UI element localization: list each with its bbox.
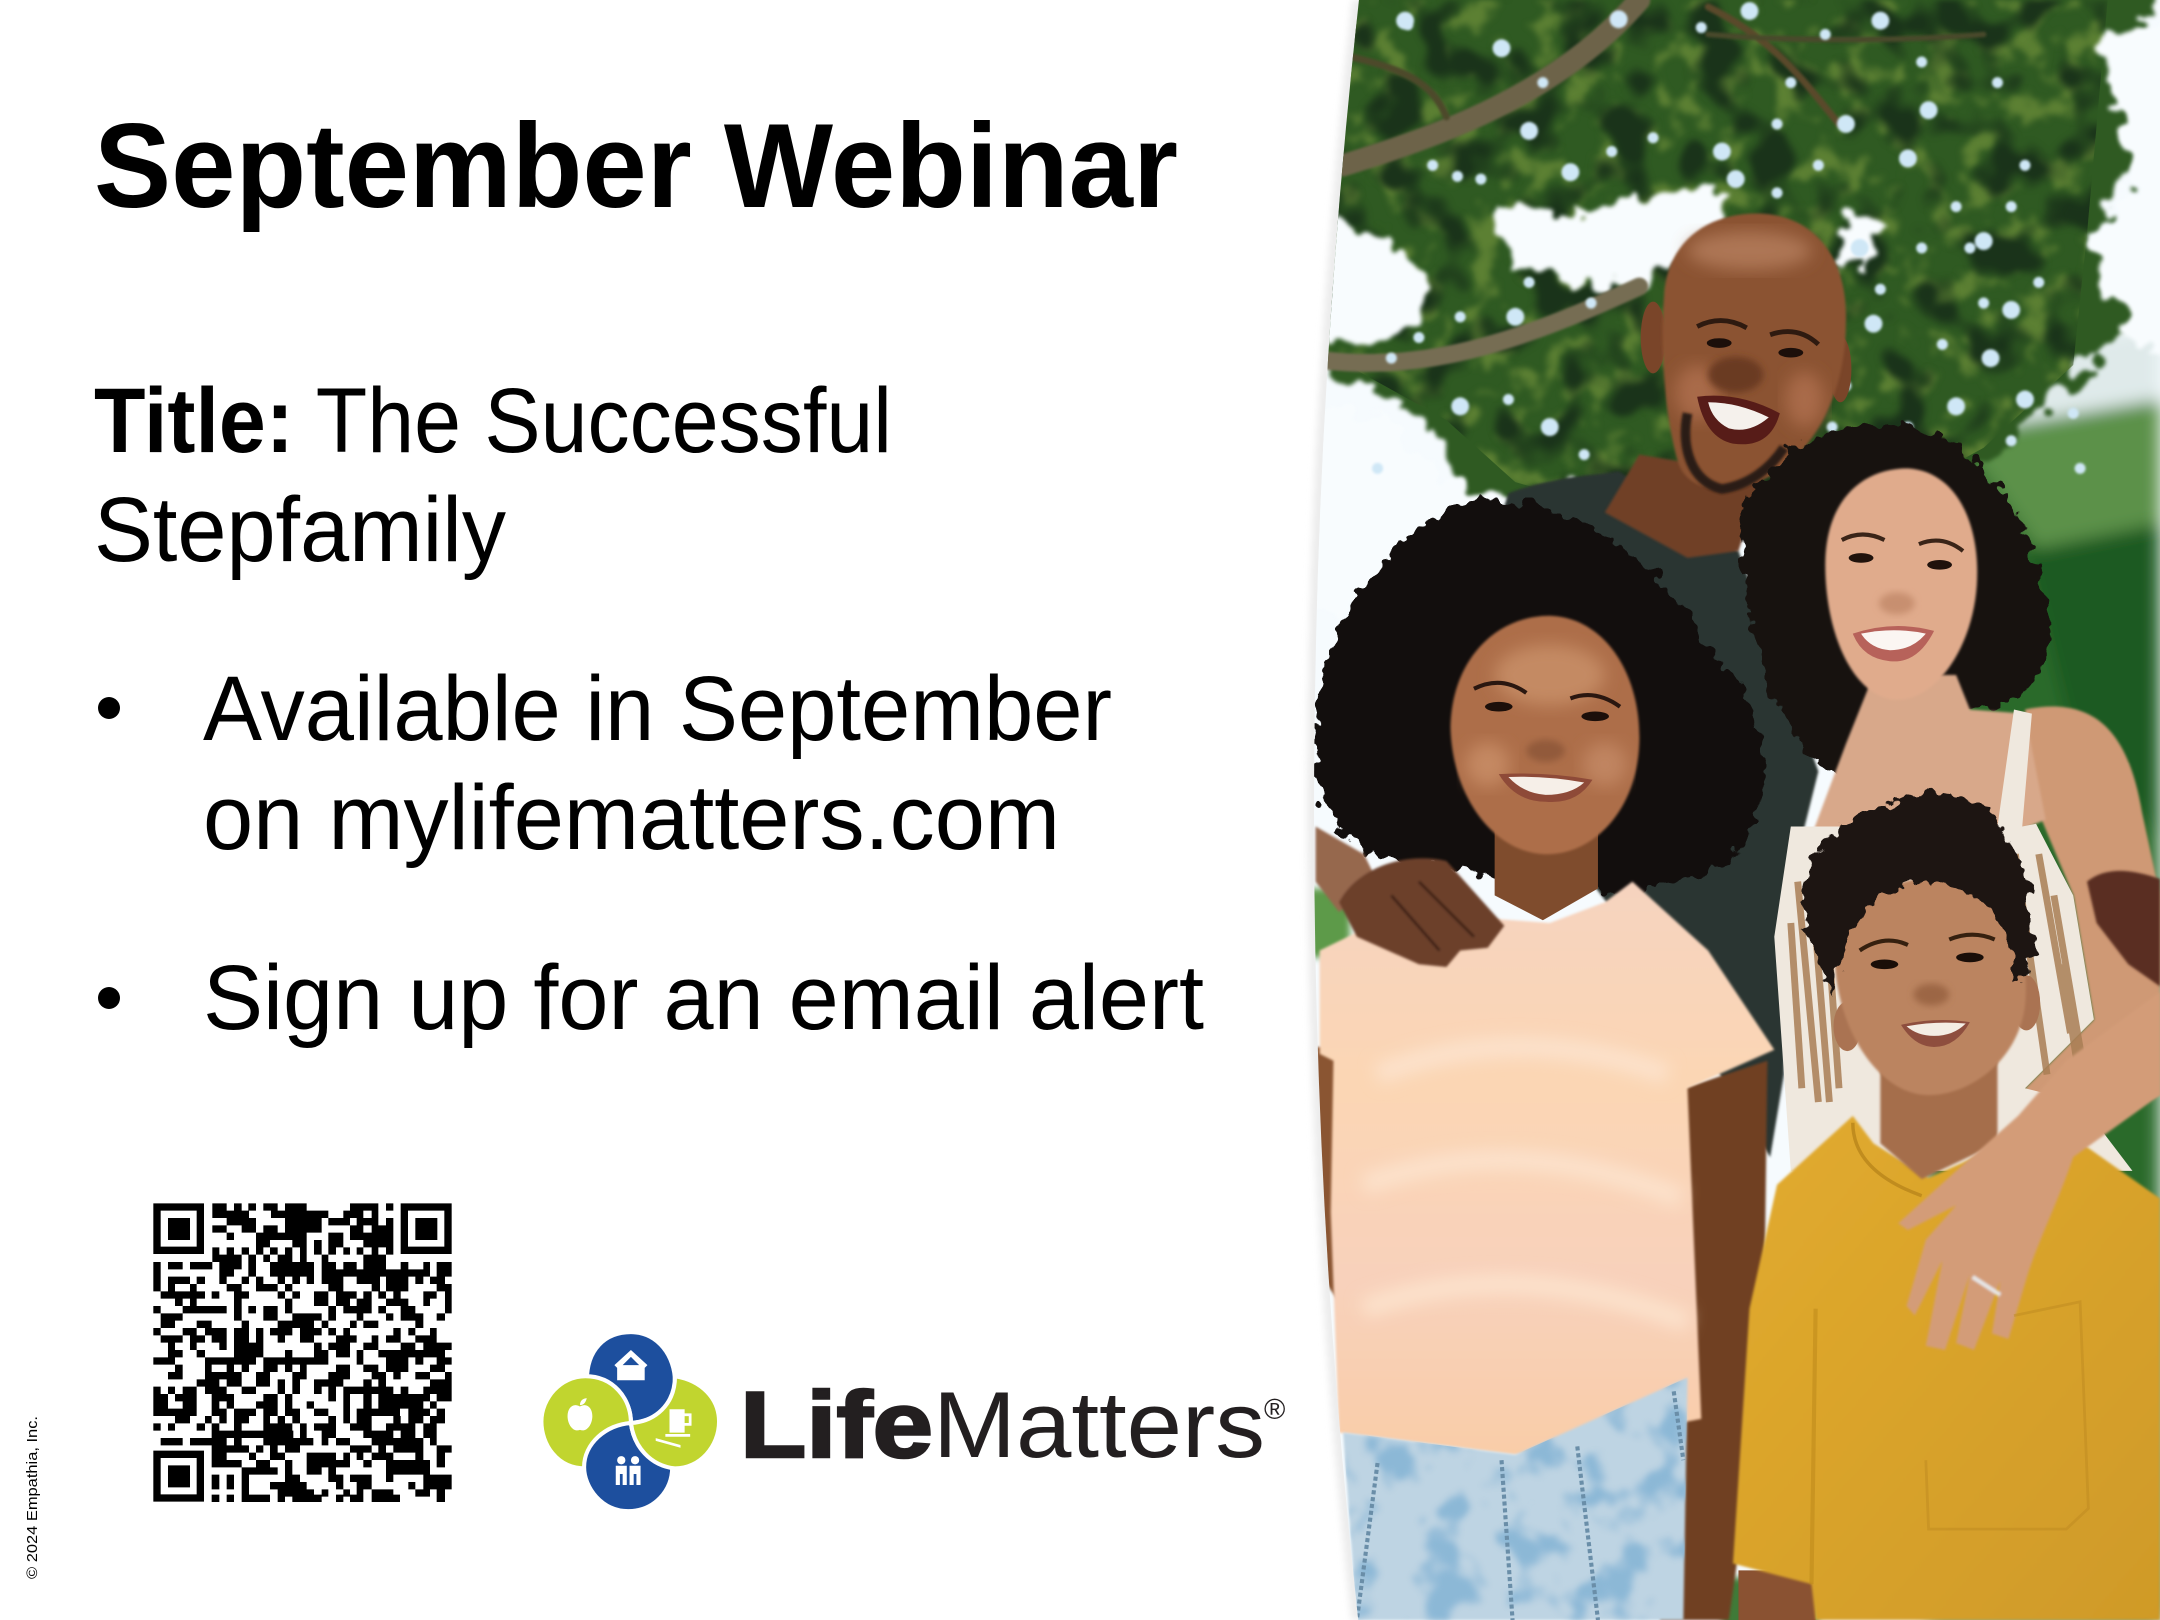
- logo wordmark: Matters: Matters: [933, 1372, 1265, 1477]
- photo: smiling family under a tree: [1295, 0, 2160, 1620]
- icon: coffee cup: [656, 1409, 692, 1448]
- background bush: [1929, 324, 2160, 1620]
- woman: striped dress: [1774, 709, 2132, 1171]
- man: ears: [1641, 302, 1851, 402]
- girl: neck: [1495, 827, 1598, 920]
- girl: hair: [1316, 499, 1764, 895]
- webinar title text: Title: The Successful: [94, 370, 892, 472]
- boy: yellow shirt: [1733, 1116, 2160, 1620]
- icon: family figures: [616, 1456, 641, 1485]
- tree branches: [1329, 0, 1984, 363]
- man: hand on girl's shoulder: [1316, 827, 1504, 967]
- leaf bokeh highlights: [1378, 11, 2080, 468]
- man: shirt: [1502, 471, 1820, 1158]
- icon: house with plant: [614, 1350, 647, 1380]
- webinar title text: [94, 370, 892, 581]
- boy: curly hair: [1803, 794, 2035, 999]
- girl: arms: [1316, 1047, 1767, 1620]
- bullet list: on mylifematters.com: [203, 767, 1060, 869]
- girl: pink t-shirt: [1320, 882, 1774, 1455]
- bullet list: Sign up for an email alert: [203, 947, 1204, 1049]
- woman: arm and hand on boy's shoulder: [1898, 992, 2160, 1350]
- logo wordmark: Life: Life: [740, 1372, 933, 1477]
- LifeMatters logo: [541, 1332, 933, 1511]
- tree canopy: [1327, 0, 2159, 500]
- bullet list: Available in September: [203, 658, 1112, 760]
- boy: shirt pocket: [1926, 1302, 2088, 1529]
- registered mark: ®: [1264, 1394, 1285, 1426]
- QR code: [153, 1203, 452, 1502]
- woman: face: [1825, 468, 1977, 700]
- boy: face: [1835, 877, 2026, 1095]
- bullet list: [98, 658, 1204, 1049]
- green strips by the girl and at the bottom: [1309, 889, 1818, 1620]
- girl: jeans: [1343, 1378, 1687, 1620]
- sky patches through leaves: [1329, 24, 2160, 502]
- girl: face: [1451, 616, 1639, 854]
- sky: [1295, 0, 2160, 1620]
- icon: apple: [568, 1398, 592, 1430]
- man: neck: [1605, 455, 1763, 558]
- man: head: [1663, 214, 1846, 489]
- logo mark: four pinwheel petals: [541, 1332, 719, 1511]
- woman: shoulders and arm: [1813, 673, 2160, 1098]
- boy: ears: [1834, 975, 2040, 1051]
- title: September Webinar: [94, 99, 1178, 233]
- man: hand on woman's arm: [2087, 871, 2160, 986]
- webinar title text: Stepfamily: [94, 479, 506, 581]
- woman: hair: [1738, 424, 2049, 774]
- boy: neck: [1880, 1061, 1997, 1179]
- photo edge shadow: [1307, 0, 1371, 1620]
- copyright notice: © 2024 Empathia, Inc.: [24, 1416, 41, 1579]
